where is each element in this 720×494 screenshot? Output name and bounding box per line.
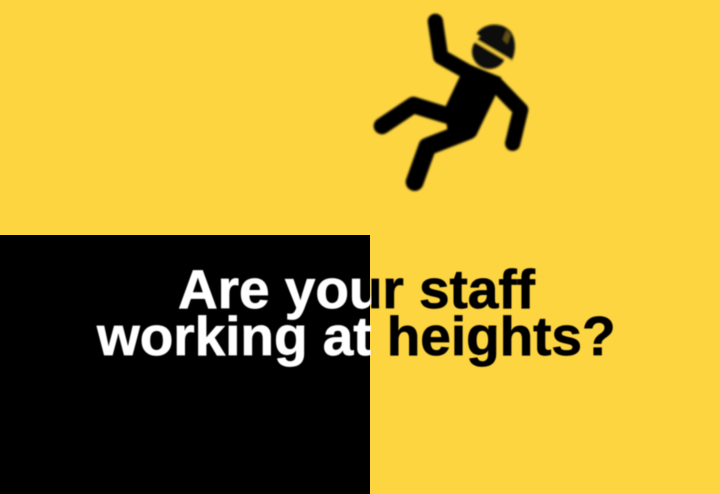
headline black part on yellow: Are your staff	[178, 258, 536, 320]
black panel	[0, 235, 370, 494]
lower leg	[415, 131, 468, 182]
head	[472, 34, 507, 69]
headline white part on black: working at heights?	[96, 305, 616, 367]
hard hat	[477, 25, 515, 61]
raised arm	[435, 21, 470, 73]
headline	[96, 258, 616, 367]
headline white part on black: Are your staff	[178, 258, 536, 320]
hat highlight	[503, 30, 511, 44]
torso	[445, 63, 501, 136]
icon: falling worker with hard hat	[382, 21, 521, 182]
headline black part on yellow: working at heights?	[96, 305, 616, 367]
headline white part on black	[96, 269, 372, 368]
headline black part on yellow	[370, 267, 614, 368]
lowered arm	[495, 83, 521, 143]
hat brim stripe	[475, 40, 511, 61]
upper leg	[382, 105, 453, 126]
